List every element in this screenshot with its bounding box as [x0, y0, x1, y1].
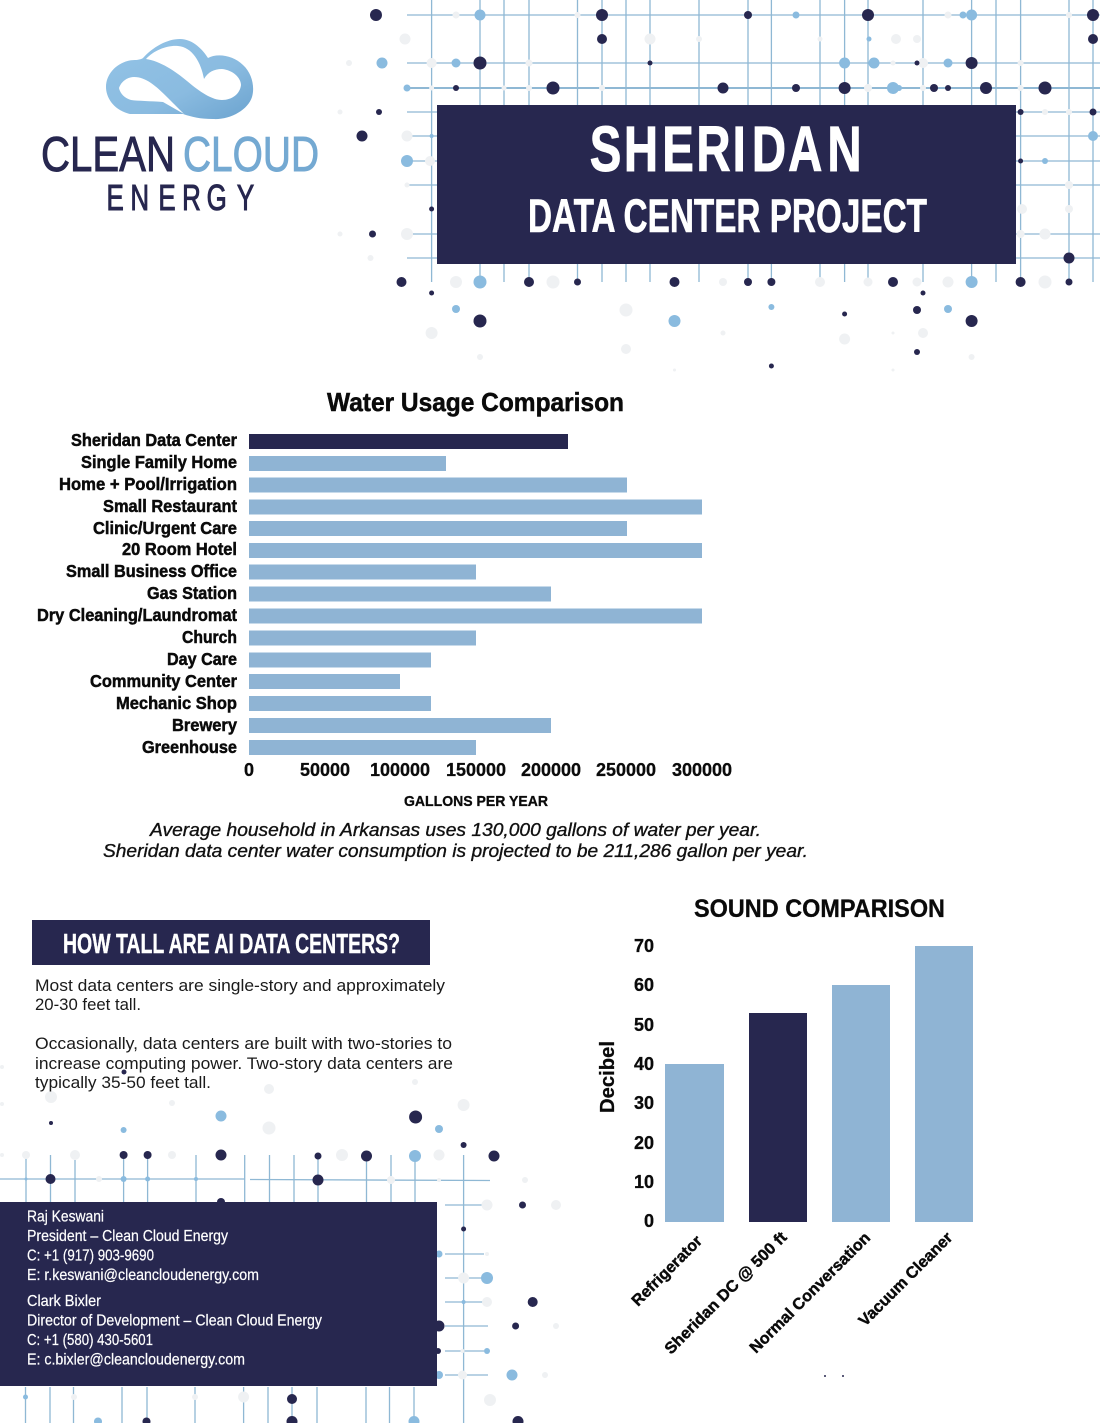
bar chart: sound comparison: Decibel: [597, 1041, 619, 1113]
bar chart: sound comparison: Sheridan DC @ 500 ft: [662, 1229, 791, 1358]
text block: data center heights: increase computing power. Two-story data centers are: [35, 1054, 453, 1073]
text block: data center heights: 20-30 feet tall.: [35, 995, 141, 1014]
panel: how tall heading: [32, 920, 430, 965]
bar chart: sound comparison: 10: [634, 1172, 654, 1192]
caption: household water use: [103, 819, 808, 861]
bar chart: water usage: Clinic/Urgent Care: [93, 518, 237, 538]
logo: Clean Cloud Energy: CLOUD: [183, 128, 319, 182]
bar chart: water usage: 50000: [300, 760, 350, 780]
bar chart: water usage: [37, 430, 732, 810]
bar chart: sound comparison: Vacuum Cleaner: [856, 1229, 956, 1330]
bar chart: water usage: Small Restaurant: [103, 496, 237, 516]
heading: water usage comparison: Water Usage Comparison: [327, 387, 624, 417]
bar chart: water usage: Greenhouse: [142, 737, 237, 757]
logo: Clean Cloud Energy: [41, 39, 319, 218]
bar chart: water usage: 250000: [596, 760, 656, 780]
text block: data center heights: Most data centers are single-story and approximately: [35, 976, 446, 995]
bar chart: water usage: 300000: [672, 760, 732, 780]
text block: data center heights: Occasionally, data centers are built with two-stories to: [35, 1034, 452, 1053]
background: circuit grid bottom left: [0, 1065, 561, 1423]
icon: infinity cloud: [106, 39, 253, 119]
title banner: [437, 105, 1016, 264]
bar chart: sound comparison: Normal Conversation: [747, 1230, 874, 1357]
bar chart: water usage: Mechanic Shop: [116, 693, 237, 713]
bar chart: sound comparison: 0: [644, 1211, 654, 1231]
bar chart: water usage: Church: [182, 627, 237, 647]
bar chart: sound comparison: 40: [634, 1054, 654, 1074]
text block: data center heights: typically 35-50 feet tall.: [35, 1073, 211, 1092]
logo wordmark: CLEAN: [41, 128, 175, 182]
bar chart: water usage: Gas Station: [147, 583, 237, 603]
bar chart: water usage: GALLONS PER YEAR: [404, 794, 549, 810]
title: Sheridan: SHERIDAN: [590, 113, 862, 185]
panel: contacts: E: r.keswani@cleancloudenergy.com: [27, 1267, 259, 1284]
subtitle: Data Center Project: DATA CENTER PROJECT: [528, 189, 927, 242]
panel: contacts: C: +1 (917) 903-9690: [27, 1248, 154, 1264]
bar chart: water usage: 150000: [446, 760, 506, 780]
panel: how tall heading: HOW TALL ARE AI DATA CENTERS?: [63, 928, 400, 959]
text block: data center heights: [35, 976, 453, 1092]
panel: contacts: E: c.bixler@cleancloudenergy.com: [27, 1352, 245, 1368]
bar chart: sound comparison: 30: [634, 1093, 654, 1113]
bar chart: sound comparison: [597, 936, 973, 1377]
bar chart: water usage: Dry Cleaning/Laundromat: [37, 605, 237, 625]
bar chart: water usage: Small Business Office: [66, 561, 237, 581]
heading: sound comparison: SOUND COMPARISON: [694, 895, 945, 923]
panel: contacts: Raj Keswani: [27, 1208, 104, 1226]
panel: contacts: Director of Development – Clean Cloud Energy: [27, 1312, 322, 1330]
logo: Clean Cloud Energy: ENERGY: [107, 178, 254, 218]
caption: household water use: Sheridan data center water consumption is projected to be 211,286 gallon per year.: [103, 840, 808, 861]
bar chart: sound comparison: 50: [634, 1015, 654, 1035]
panel: contacts: Clark Bixler: [27, 1293, 102, 1310]
bar chart: sound comparison: 70: [634, 936, 654, 956]
bar chart: water usage: Brewery: [172, 715, 237, 735]
bar chart: water usage: 0: [244, 760, 254, 780]
panel: contacts: [0, 1202, 437, 1386]
bar chart: water usage: 100000: [370, 760, 430, 780]
panel: contacts: C: +1 (580) 430-5601: [27, 1332, 153, 1349]
bar chart: water usage: Single Family Home: [81, 452, 237, 472]
bar chart: sound comparison: 60: [634, 975, 654, 995]
bar chart: water usage: 20 Room Hotel: [122, 539, 237, 559]
bar chart: sound comparison: 20: [634, 1133, 654, 1153]
background: circuit grid top right: [338, 0, 1100, 372]
bar chart: water usage: Home + Pool/Irrigation: [59, 474, 237, 494]
bar chart: water usage: 200000: [521, 760, 581, 780]
bar chart: sound comparison: Refrigerator: [629, 1233, 706, 1310]
caption: household water use: Average household in Arkansas uses 130,000 gallons of water per year.: [149, 819, 761, 840]
bar chart: water usage: Community Center: [90, 671, 237, 691]
bar chart: water usage: Sheridan Data Center: [71, 430, 237, 450]
bar chart: water usage: Day Care: [167, 649, 237, 669]
panel: contacts: President – Clean Cloud Energy: [27, 1228, 228, 1245]
